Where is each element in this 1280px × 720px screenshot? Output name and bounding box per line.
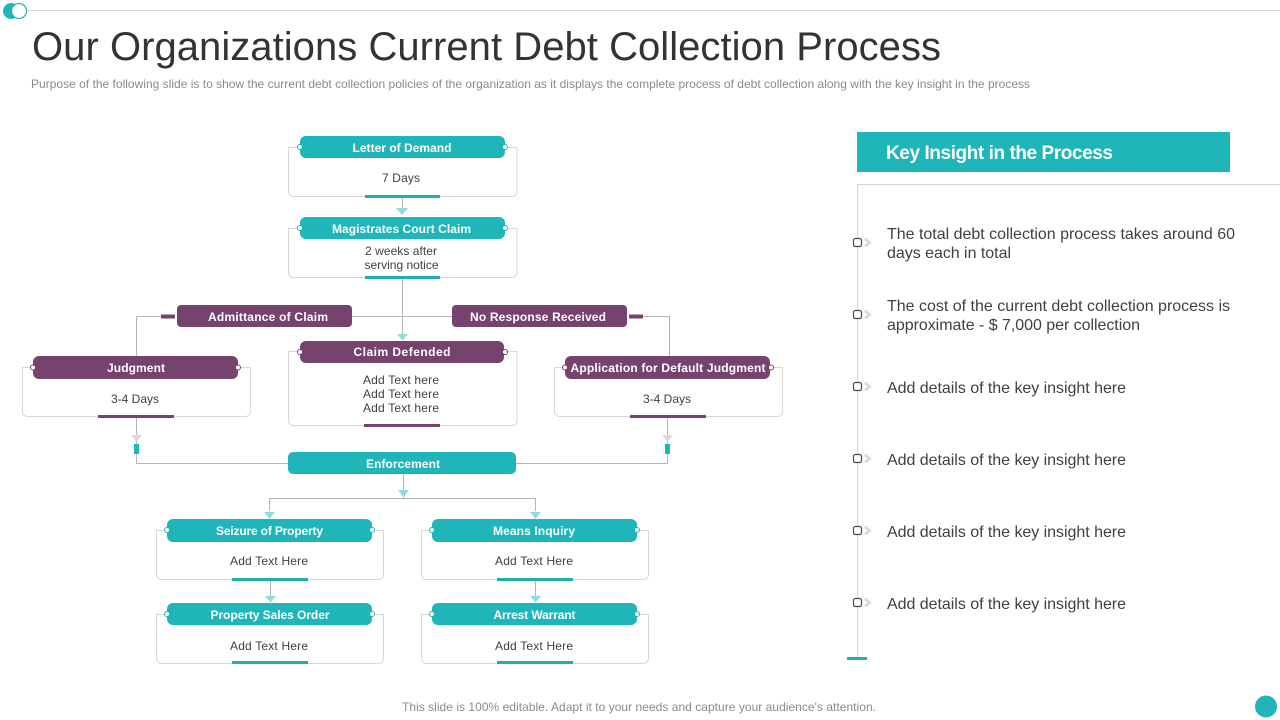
- node: Judgment: 3-4 Days: [111, 392, 159, 406]
- connector dashes: [134, 314, 670, 454]
- footer note: This slide is 100% editable. Adapt it to your needs and capture your audience's attention.: [402, 700, 876, 714]
- label: Admittance of Claim: Admittance of Claim: [208, 310, 328, 324]
- node: Letter of Demand: Letter of Demand: [352, 141, 452, 155]
- node: Property Sales Order: Property Sales Order: [210, 608, 330, 622]
- node: Means Inquiry: Means Inquiry: [493, 524, 575, 538]
- flowchart: [22, 136, 782, 664]
- node: Magistrates Court Claim: [288, 217, 517, 279]
- insight 5: Add details of the key insight here: [887, 524, 1126, 541]
- panel heading: Key Insight in the Process: [886, 143, 1113, 164]
- connectors: [136, 198, 670, 597]
- node: Enforcement: Enforcement: [366, 457, 440, 471]
- node: Means Inquiry: [422, 519, 648, 581]
- insight 2: The cost of the current debt collection process is: [887, 298, 1230, 315]
- node: Claim Defended: [288, 341, 517, 427]
- label: Admittance of Claim: [177, 305, 352, 327]
- timeline frame: [847, 184, 1280, 660]
- node: Property Sales Order: Add Text Here: [230, 639, 308, 653]
- node: Arrest Warrant: Arrest Warrant: [494, 608, 576, 622]
- node: Property Sales Order: [156, 603, 384, 664]
- node: Judgment: Judgment: [107, 361, 165, 375]
- icon: corner circle: [1255, 696, 1277, 718]
- node: Means Inquiry: Add Text Here: [495, 554, 573, 568]
- title: Our Organizations Current Debt Collection Process: [32, 25, 941, 69]
- insight 4: Add details of the key insight here: [887, 452, 1126, 469]
- node: Claim Defended: Claim Defended: [354, 345, 450, 359]
- insight 2: [854, 298, 1230, 334]
- node: Application for Default Judgment: Application for Default Judgment: [570, 361, 766, 375]
- node: Letter of Demand: 7 Days: [382, 171, 420, 185]
- node: Magistrates Court Claim: 2 weeks after: [365, 244, 437, 258]
- node: Arrest Warrant: Add Text Here: [495, 639, 573, 653]
- node: Claim Defended: Add Text here: [363, 401, 439, 415]
- panel heading: [857, 132, 1230, 172]
- label: No Response Received: [452, 305, 627, 327]
- label: No Response Received: No Response Received: [470, 310, 606, 324]
- node: Claim Defended: Add Text here: [363, 373, 439, 387]
- node: Seizure of Property: Seizure of Property: [216, 524, 323, 538]
- node: Seizure of Property: [156, 519, 384, 581]
- node: Claim Defended: Add Text here: [363, 387, 439, 401]
- panel: key insight: [847, 132, 1280, 660]
- insight 1: days each in total: [887, 245, 1011, 262]
- node: Application for Default Judgment: [554, 356, 782, 418]
- subtitle: Purpose of the following slide is to show the current debt collection policies of the organization as it displays the complete process of debt collection along with the key insight in the process: [31, 77, 1030, 91]
- node: Magistrates Court Claim: Magistrates Court Claim: [332, 222, 471, 236]
- insight 1: [854, 226, 1235, 262]
- insight 6: Add details of the key insight here: [887, 596, 1126, 613]
- node: Enforcement: [288, 452, 516, 474]
- node: Application for Default Judgment: 3-4 Days: [643, 392, 691, 406]
- insight 1: The total debt collection process takes around 60: [887, 226, 1235, 243]
- node: Arrest Warrant: [422, 603, 648, 664]
- node: Judgment: [22, 356, 250, 418]
- arrowheads: [131, 208, 673, 602]
- insight 2: approximate - $ 7,000 per collection: [887, 317, 1140, 334]
- top rule and toggle icon: [3, 3, 1280, 19]
- node: Letter of Demand: [288, 136, 517, 198]
- node: Seizure of Property: Add Text Here: [230, 554, 308, 568]
- node: Magistrates Court Claim: serving notice: [364, 258, 439, 272]
- insight 3: Add details of the key insight here: [887, 380, 1126, 397]
